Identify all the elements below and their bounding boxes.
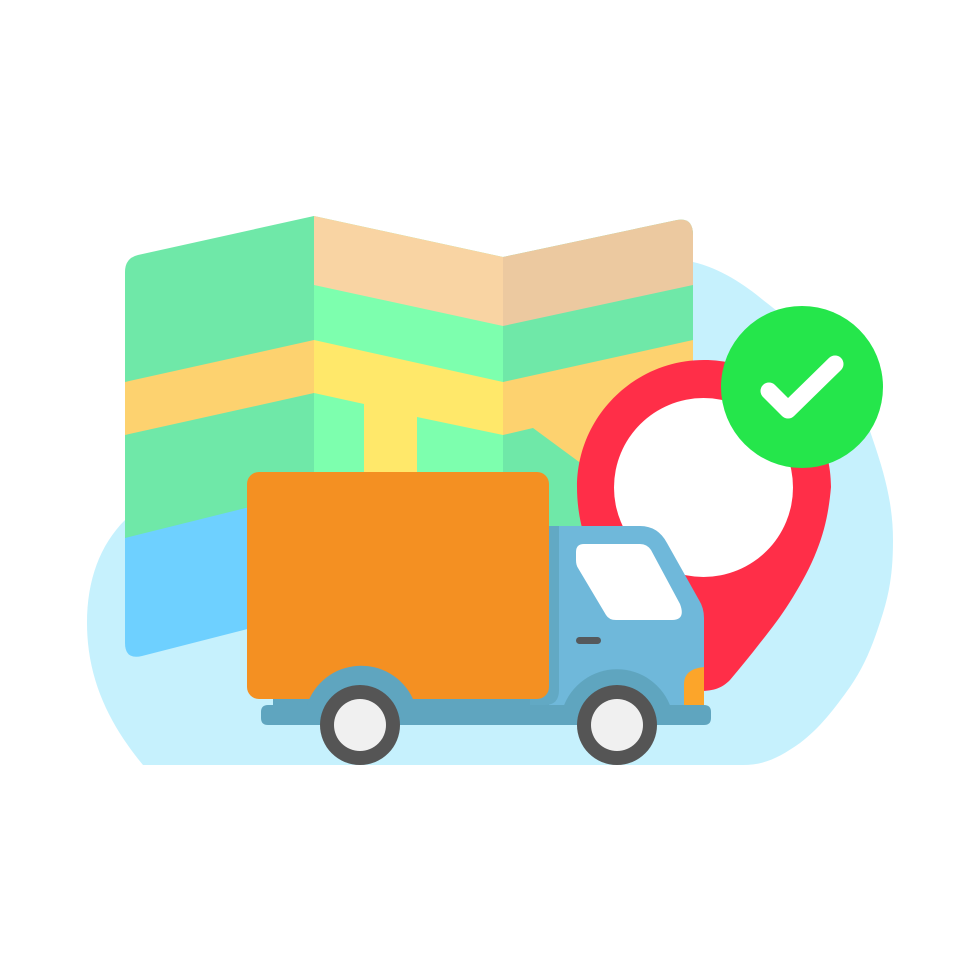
map panel: middle [314,216,503,560]
pin hole [614,398,793,577]
check badge [721,306,883,468]
rear wheel arch [307,666,413,705]
map panel: right [503,220,693,560]
location pin [577,360,831,691]
cargo box [247,472,549,699]
front wheel arch [563,669,671,708]
headlight [684,667,704,705]
cab window [576,544,682,620]
folded map [125,216,693,657]
background blob [87,262,893,765]
door handle [576,637,601,644]
map panel: left [125,216,314,657]
truck chassis [261,699,711,725]
truck cab [530,526,704,705]
rear wheel [320,685,400,765]
front wheel [577,685,657,765]
check mark [769,364,835,410]
delivery truck [247,472,711,765]
